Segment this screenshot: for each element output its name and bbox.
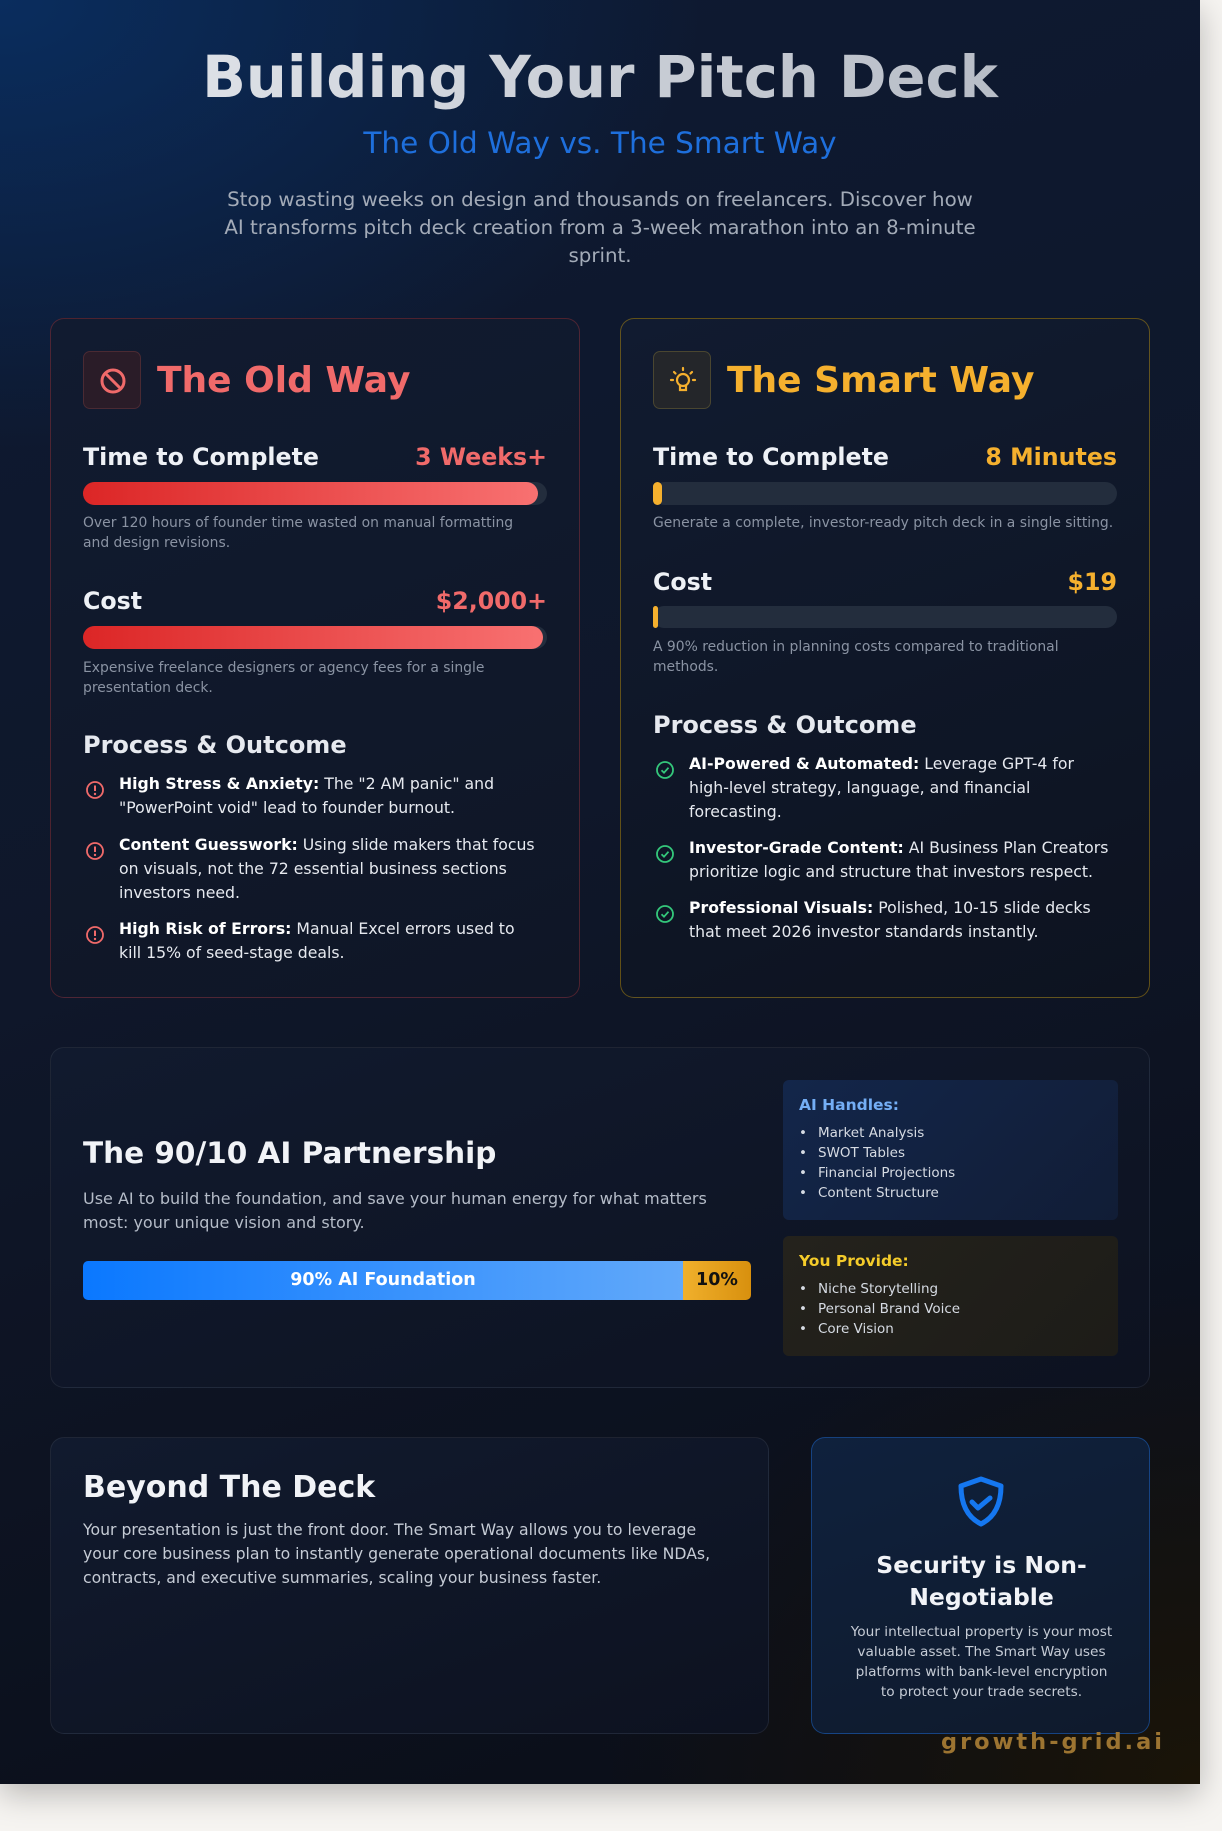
icon: lightbulb — [653, 351, 711, 409]
panel: beyond the deck — [50, 1437, 769, 1734]
metric: time: Generate a complete, investor-ready pitch deck in a single sitting. — [653, 515, 1113, 531]
metric: cost: Cost — [653, 568, 712, 596]
heading: process old: Process & Outcome — [83, 731, 347, 759]
subtitle: The Old Way vs. The Smart Way — [363, 126, 837, 160]
bar: 90/10 split: 90% AI Foundation — [290, 1270, 476, 1290]
icon: ban — [83, 351, 141, 409]
heading: smart way: The Smart Way — [727, 360, 1034, 401]
list: smart benefits: Investor-Grade Content: AI Business Plan Creators prioritize logic and structure that investors respect. — [689, 838, 1108, 881]
box: AI handles: Financial Projections — [818, 1165, 955, 1181]
box: AI handles — [783, 1080, 1118, 1220]
metric: cost: $2,000+ — [436, 587, 547, 615]
box: AI handles: AI Handles: — [799, 1096, 899, 1114]
list: old problems — [86, 774, 535, 962]
metric: time: Time to Complete — [653, 443, 889, 471]
text: beyond: Your presentation is just the front door. The Smart Way allows you to leverage your core business plan to instantly generate operational documents like NDAs, contracts, and executive summaries, scaling your business faster. — [83, 1520, 710, 1587]
text: partnership: Use AI to build the foundation, and save your human energy for what matters most: your unique vision and story. — [83, 1189, 707, 1232]
list: old problems: High Stress & Anxiety: The "2 AM panic" and "PowerPoint void" lead to founder burnout. — [119, 774, 494, 817]
icon: shield — [958, 1476, 1004, 1526]
heading: process smart: Process & Outcome — [653, 711, 917, 739]
brand: growth-grid.ai: growth-grid.ai — [941, 1729, 1165, 1755]
panel: smart way — [620, 318, 1150, 998]
metric: time: Over 120 hours of founder time wasted on manual formatting and design revisions. — [83, 515, 513, 551]
metric: cost: Expensive freelance designers or agency fees for a single presentation deck. — [83, 660, 484, 696]
heading: partnership: The 90/10 AI Partnership — [83, 1136, 496, 1170]
list: smart benefits: AI-Powered & Automated: Leverage GPT-4 for high-level strategy, language, and financial forecasting. — [689, 754, 1074, 821]
metric: time — [83, 443, 547, 551]
list: smart benefits: Professional Visuals: Polished, 10-15 slide decks that meet 2026 investor standards instantly. — [689, 898, 1091, 941]
title — [0, 42, 1200, 114]
panel: old way — [50, 318, 580, 998]
bar: 90/10 split — [83, 1261, 751, 1300]
metric: time: 3 Weeks+ — [415, 443, 547, 471]
intro text: Stop wasting weeks on design and thousands on freelancers. Discover how AI transforms pitch deck creation from a 3-week marathon into an 8-minute sprint. — [224, 188, 976, 267]
metric: cost: Cost — [83, 587, 142, 615]
panel: 90/10 partnership — [50, 1047, 1150, 1388]
text: security: Your intellectual property is your most valuable asset. The Smart Way uses platforms with bank-level encryption to protect your trade secrets. — [851, 1624, 1112, 1700]
heading: beyond: Beyond The Deck — [83, 1470, 375, 1505]
metric: time: Time to Complete — [83, 443, 319, 471]
box: AI handles: Market Analysis — [818, 1125, 924, 1141]
list: old problems: High Risk of Errors: Manual Excel errors used to kill 15% of seed-stage deals. — [119, 919, 515, 962]
list: old problems: Content Guesswork: Using slide makers that focus on visuals, not the 72 essential business sections investors need. — [119, 835, 535, 902]
box: you provide: Personal Brand Voice — [818, 1301, 960, 1317]
metric: cost — [83, 587, 547, 696]
metric: cost: A 90% reduction in planning costs compared to traditional methods. — [653, 639, 1059, 675]
title: Building Your Pitch Deck — [202, 44, 998, 111]
box: AI handles: Content Structure — [818, 1185, 939, 1201]
panel: security — [811, 1437, 1150, 1734]
box: you provide: Core Vision — [818, 1321, 894, 1337]
box: AI handles: SWOT Tables — [818, 1145, 905, 1161]
bar: 90/10 split: 10% — [696, 1270, 738, 1290]
metric: cost — [653, 568, 1117, 675]
heading: old way: The Old Way — [157, 360, 410, 401]
metric: time — [653, 443, 1117, 531]
list: smart benefits — [656, 754, 1108, 941]
box: you provide: Niche Storytelling — [818, 1281, 938, 1297]
box: you provide — [783, 1236, 1118, 1356]
box: you provide: You Provide: — [799, 1252, 909, 1270]
metric: time: 8 Minutes — [985, 443, 1117, 471]
metric: cost: $19 — [1068, 568, 1117, 596]
heading: security: Security is Non-Negotiable — [876, 1551, 1087, 1611]
